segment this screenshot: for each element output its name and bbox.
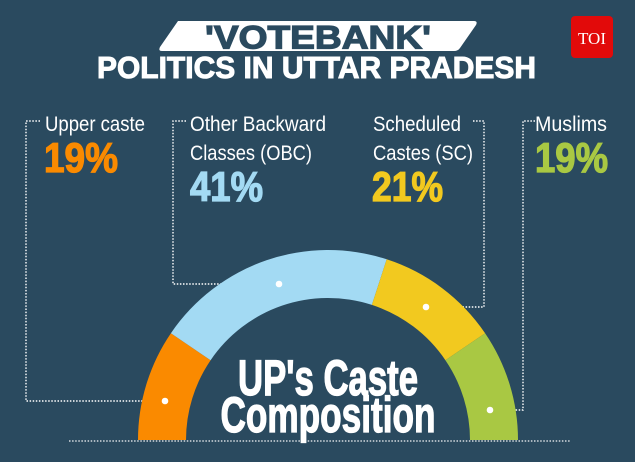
label: upper caste: Upper caste	[45, 113, 145, 136]
label: OBC: 41%	[190, 163, 263, 210]
semicircle chart	[138, 250, 518, 440]
label: Muslims: 19%	[535, 134, 608, 181]
chart center label: UP's Caste	[238, 350, 418, 406]
title banner	[159, 20, 477, 56]
label: SC: Scheduled	[373, 113, 461, 136]
label: OBC: Other Backward	[190, 113, 326, 136]
label: upper caste	[44, 113, 145, 181]
label: SC: Castes (SC)	[373, 142, 473, 165]
title line 2: POLITICS IN UTTAR PRADESH	[97, 50, 536, 85]
label: SC	[372, 113, 473, 210]
label: Muslims	[535, 113, 608, 181]
chart center label	[220, 350, 436, 443]
chart center label: Composition	[220, 387, 436, 443]
title banner: 'VOTEBANK'	[205, 20, 431, 56]
label: SC: 21%	[372, 163, 443, 210]
label: upper caste: 19%	[44, 134, 118, 181]
label: OBC	[190, 113, 326, 210]
icon: TOI logo: TOI	[578, 29, 606, 48]
connector lines	[26, 121, 571, 441]
label: OBC: Classes (OBC)	[190, 142, 312, 165]
icon: TOI logo	[571, 16, 613, 58]
label: Muslims: Muslims	[535, 113, 607, 136]
